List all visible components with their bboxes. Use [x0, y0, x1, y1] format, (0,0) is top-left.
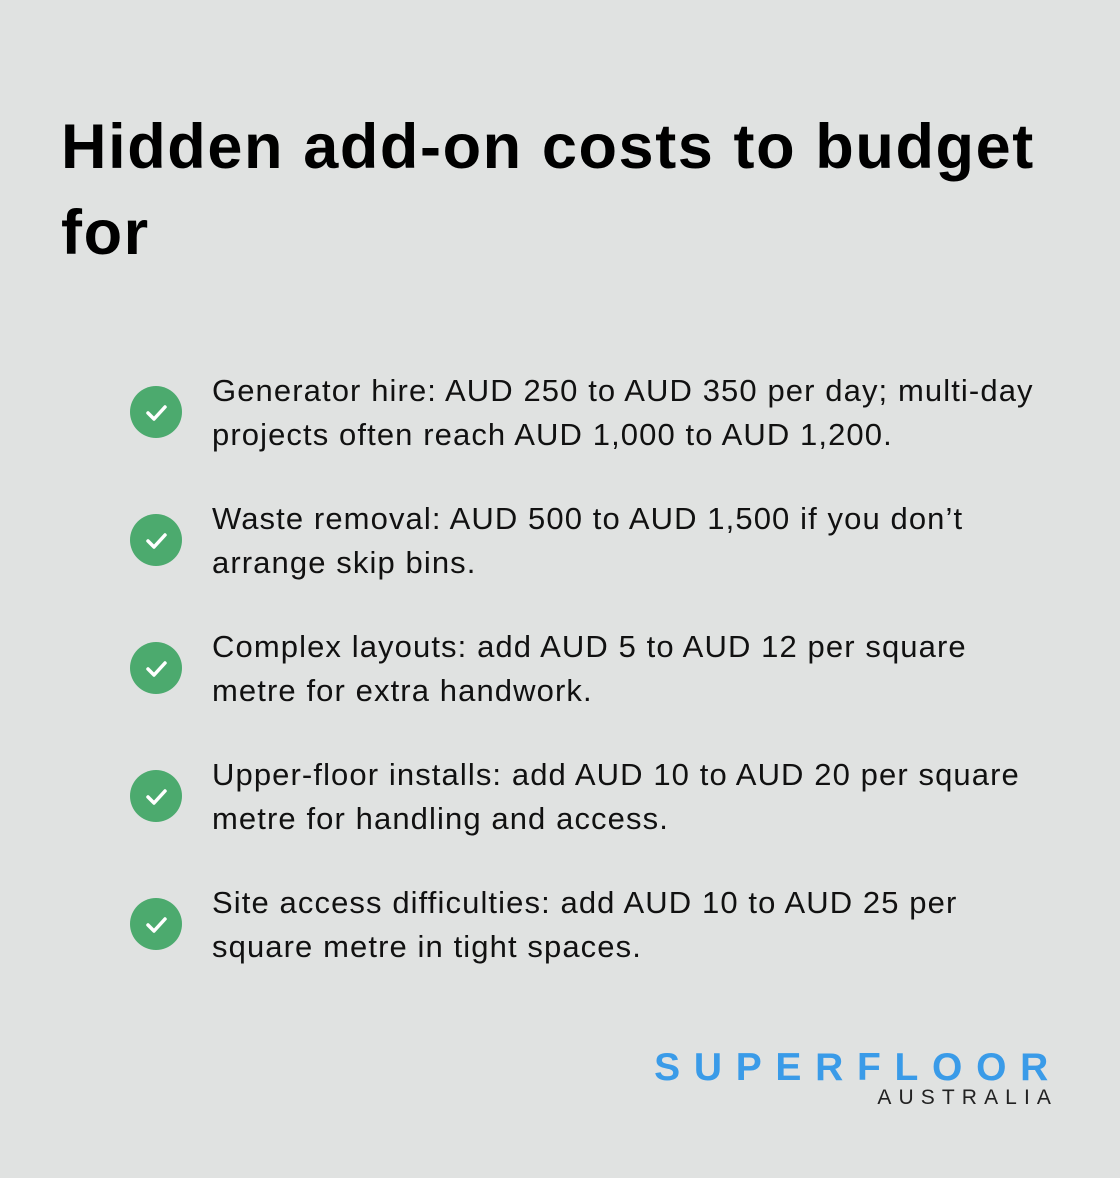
- text: Site access difficulties: add AUD 10 to AUD 25 per: [212, 885, 957, 920]
- text: [212, 757, 1020, 836]
- icon: check: [130, 898, 182, 950]
- text: arrange skip bins.: [212, 545, 476, 580]
- text: square metre in tight spaces.: [212, 929, 642, 964]
- icon: check: [130, 642, 182, 694]
- text: [212, 373, 1034, 452]
- text: [212, 629, 967, 708]
- item: generator hire: [130, 373, 1034, 452]
- text: metre for extra handwork.: [212, 673, 593, 708]
- icon: check: [130, 770, 182, 822]
- item: site access: [130, 885, 957, 964]
- text: Complex layouts: add AUD 5 to AUD 12 per square: [212, 629, 967, 664]
- item: upper-floor installs: [130, 757, 1020, 836]
- title: for: [61, 198, 150, 268]
- text: metre for handling and access.: [212, 801, 669, 836]
- text: [212, 501, 963, 580]
- logo: AUSTRALIA: [877, 1086, 1058, 1109]
- item: waste removal: [130, 501, 963, 580]
- icon: check: [130, 386, 182, 438]
- text: [212, 885, 957, 964]
- item: complex layouts: [130, 629, 967, 708]
- logo: [654, 1046, 1062, 1109]
- text: Upper-floor installs: add AUD 10 to AUD 20 per square: [212, 757, 1020, 792]
- icon: check: [130, 514, 182, 566]
- logo: SUPERFLOOR: [654, 1046, 1062, 1089]
- text: projects often reach AUD 1,000 to AUD 1,200.: [212, 417, 893, 452]
- title: Hidden add-on costs to budget: [61, 112, 1035, 182]
- text: Waste removal: AUD 500 to AUD 1,500 if you don’t: [212, 501, 963, 536]
- text: Generator hire: AUD 250 to AUD 350 per day; multi-day: [212, 373, 1034, 408]
- title: [61, 112, 1035, 268]
